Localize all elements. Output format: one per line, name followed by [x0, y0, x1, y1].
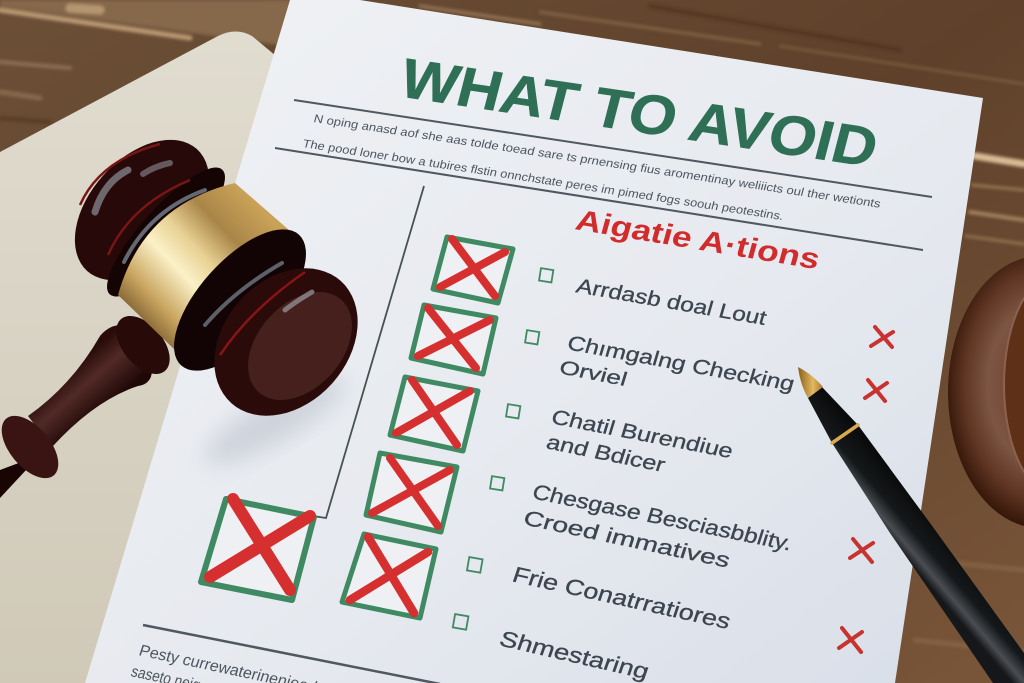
gavel shadow	[195, 361, 355, 479]
crossed box 1	[433, 237, 513, 303]
small checkboxes	[453, 268, 553, 630]
red margin marks	[839, 327, 893, 652]
checklist items: Arrdasb doal Lout	[574, 275, 769, 330]
checklist items: Shmestaring	[496, 626, 653, 683]
crossed box 3	[390, 377, 478, 451]
gavel	[0, 114, 387, 498]
crossed box 4	[366, 453, 457, 532]
checklist items	[496, 275, 797, 683]
intro text block	[275, 100, 932, 250]
intro text block: N oping anasd aof she aas tolde toead sare ts prnensing fius aromentinay weliiicts oul ther wetionts	[312, 113, 882, 211]
pen	[798, 367, 1024, 683]
checklist items: Chesgase Besciasbblity.	[529, 481, 795, 555]
large crossed boxes	[342, 237, 513, 618]
gavel head	[48, 114, 387, 444]
checklist items: and Bdicer	[543, 431, 668, 477]
checklist items: Croed immatives	[520, 507, 733, 572]
cream folder	[0, 32, 276, 683]
crossed box 5	[342, 534, 436, 618]
intro text block: The pood loner bow a tubires flstin onnchstate peres im pimed fogs soouh peotestins.	[301, 138, 785, 223]
checklist items: Frie Conatrratiores	[509, 562, 734, 634]
footer text	[129, 625, 440, 683]
title: WHAT TO AVOID	[394, 46, 885, 179]
gavel handle	[0, 306, 180, 498]
crossed box 2	[411, 305, 496, 374]
sound block	[948, 256, 1024, 528]
column rule	[313, 186, 424, 518]
crossed box large	[201, 499, 314, 600]
checklist items: Chatil Burendiue	[549, 406, 736, 463]
section heading: Aigatie A·tions	[572, 205, 823, 276]
checklist items: Chımgalng Checking	[565, 332, 797, 396]
checklist items: Orviel	[557, 357, 630, 391]
